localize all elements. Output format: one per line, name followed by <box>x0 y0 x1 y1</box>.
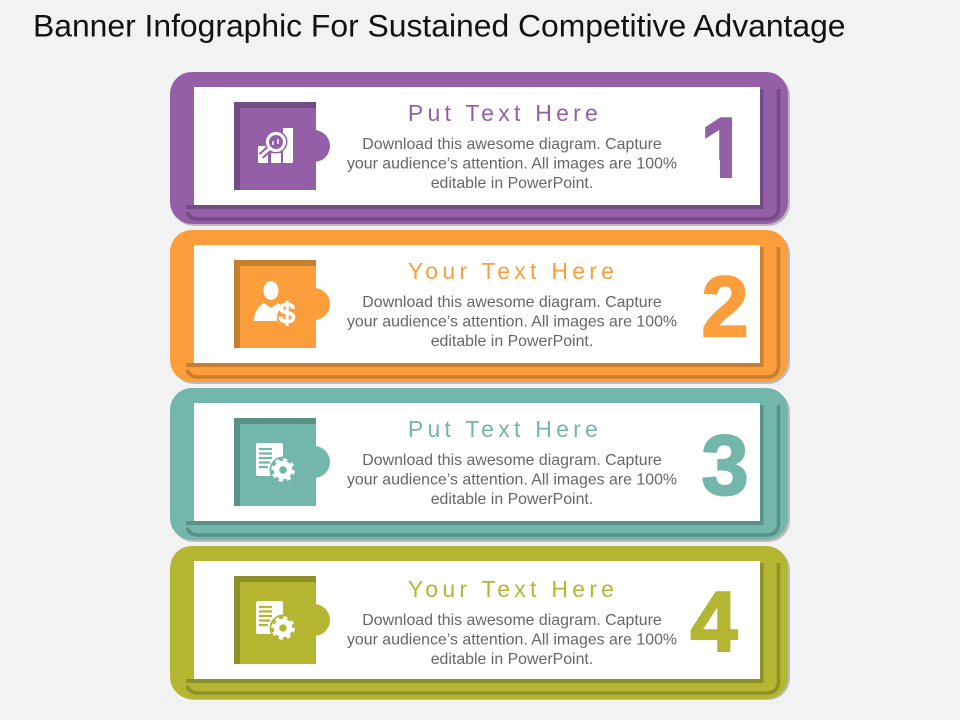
heading: Your Text Here <box>408 258 618 284</box>
puzzle icon tile <box>234 576 330 664</box>
puzzle icon tile <box>234 260 330 348</box>
body text: your audience’s attention. All images are 100% <box>347 632 677 648</box>
body text: Download this awesome diagram. Capture <box>362 452 662 469</box>
puzzle icon tile <box>234 418 330 506</box>
body text: Download this awesome diagram. Capture <box>362 136 662 153</box>
body text: your audience’s attention. All images are 100% <box>347 314 677 330</box>
body text: Download this awesome diagram. Capture <box>362 294 662 311</box>
icon: bar chart with magnifier <box>258 128 293 163</box>
heading: Put Text Here <box>408 100 602 126</box>
body text: your audience’s attention. All images are 100% <box>347 156 677 172</box>
white card <box>194 403 760 521</box>
heading: Put Text Here <box>408 416 602 442</box>
panel: step 4 <box>170 546 790 700</box>
heading: Your Text Here <box>408 576 618 602</box>
panel: step 3 <box>170 388 790 542</box>
body text: editable in PowerPoint. <box>431 491 593 508</box>
number: 3 <box>701 418 749 514</box>
puzzle icon tile <box>234 102 330 190</box>
panel: step 2 <box>170 230 790 384</box>
body text: editable in PowerPoint. <box>431 333 593 350</box>
number: 4 <box>690 575 738 670</box>
number: 1 <box>700 101 748 196</box>
white card <box>194 87 760 205</box>
body text: editable in PowerPoint. <box>431 175 593 192</box>
body text: editable in PowerPoint. <box>431 651 593 668</box>
body text: your audience’s attention. All images are 100% <box>347 472 677 488</box>
icon: document with gear <box>256 601 296 642</box>
white card <box>194 245 760 363</box>
title: Banner Infographic For Sustained Competitive Advantage <box>33 8 846 44</box>
icon: document with gear <box>256 443 296 484</box>
icon: person with dollar: $ <box>279 298 295 330</box>
panel: step 1 <box>170 72 790 226</box>
icon: person with dollar <box>254 281 295 330</box>
body text: Download this awesome diagram. Capture <box>362 612 662 629</box>
number: 2 <box>701 260 749 355</box>
white card <box>194 561 760 679</box>
